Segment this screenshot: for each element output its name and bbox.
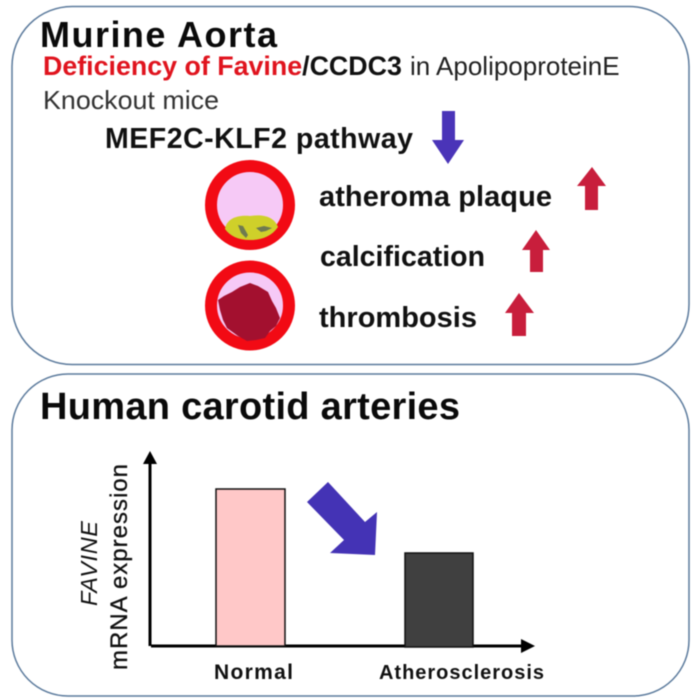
axis label: favine: FAVINE [76,521,102,606]
icon: vessel with thrombus [211,266,289,344]
label: atheroma plaque: atheroma plaque [319,181,552,213]
heading: Human carotid arteries: Human carotid arteries [40,386,460,428]
arrow: pathway down [432,111,464,164]
heading: Murine Aorta: Murine Aorta [40,14,278,55]
arrow: plaque up [577,167,606,210]
panel: murine aorta [12,6,689,364]
axis label: normal: Normal [214,661,293,684]
label: thrombosis: thrombosis [319,302,477,334]
panel: human carotid arteries [12,374,689,696]
axis label: atherosclerosis: Atherosclerosis [379,662,544,684]
arrow: calcification up [522,230,550,272]
text: pathway label: MEF2C-KLF2 pathway [105,123,413,155]
arrow: decrease [307,482,377,555]
bar: normal [216,489,285,646]
bar chart [76,451,544,684]
icon: vessel with atheroma plaque [211,166,289,244]
x axis [151,639,535,653]
text: deficiency statement line 2: Knockout mice [43,85,219,115]
text: deficiency statement line 1: in ApolipoproteinE [410,51,620,81]
y axis [143,451,157,646]
axis label: mRNA expression: mRNA expression [106,464,133,670]
bar: atherosclerosis [405,553,473,647]
text: deficiency statement line 1: Deficiency of Favine/CCDC3 [43,51,402,81]
arrow: thrombosis up [505,293,534,336]
label: calcification: calcification [320,241,485,273]
